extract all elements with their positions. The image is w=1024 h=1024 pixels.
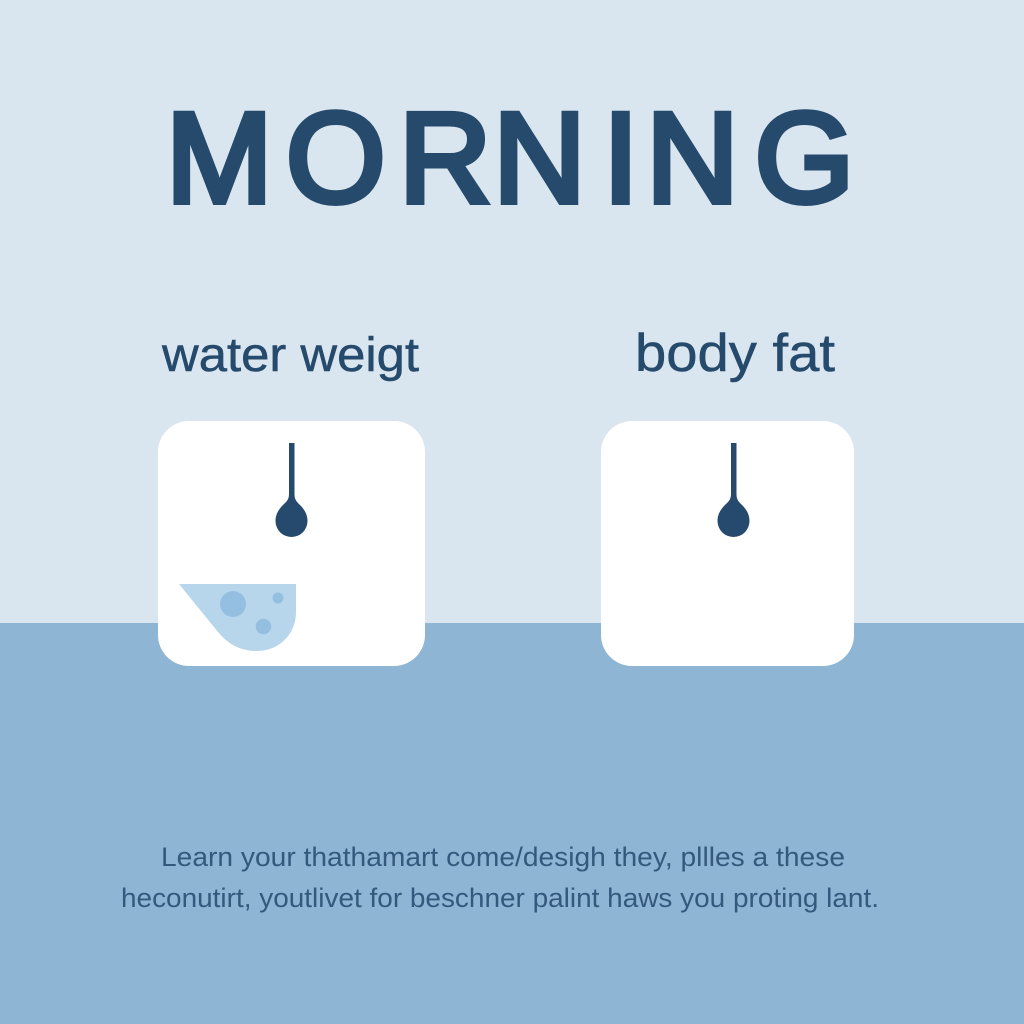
scale card (158, 421, 425, 666)
description line 2: heconutirt, youtlivet for beschner palint haws you proting lant. (121, 883, 879, 913)
panel: body fat scale (601, 421, 854, 666)
panel: water weight scale (158, 421, 425, 666)
panel: blue lower background (0, 623, 1024, 1024)
panel: light upper background (0, 0, 1024, 624)
medium bubble (256, 619, 271, 634)
icon: water basin (179, 584, 296, 651)
heading: water weight: water weigt (161, 329, 419, 382)
icon: scale needle (718, 443, 750, 537)
water shape (179, 584, 296, 651)
heading: body fat: body fat (635, 324, 835, 383)
icon: scale needle (276, 443, 308, 537)
title: MORNING (166, 87, 854, 230)
large bubble (220, 591, 246, 617)
scale card (601, 421, 854, 666)
text block: description (121, 842, 879, 913)
small bubble (272, 592, 284, 604)
description line 1: Learn your thathamart come/desigh they, pllles a these (161, 842, 845, 872)
